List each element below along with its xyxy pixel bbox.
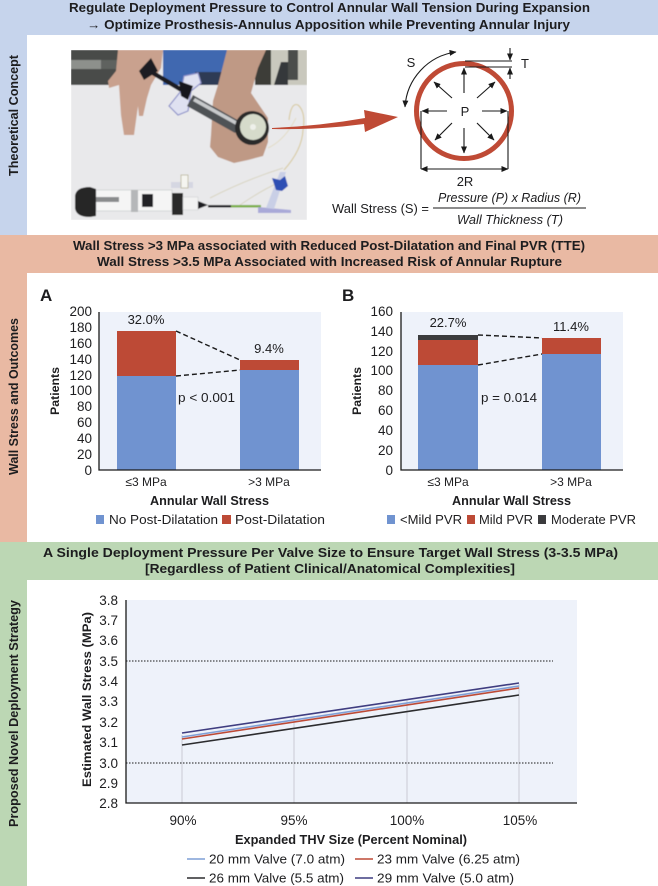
legend: chart A: Post-Dilatation xyxy=(235,513,325,527)
chart B: paravalvular regurgitation by annular wall stress: 20 xyxy=(378,443,393,458)
legend: chart B: <Mild PVR xyxy=(400,513,462,527)
line chart: estimated wall stress vs expanded THV size: 90% xyxy=(169,813,197,828)
chart B: paravalvular regurgitation by annular wall stress: 140 xyxy=(370,324,393,339)
formula: wall stress: Wall Stress (S) = xyxy=(332,202,429,216)
side label: proposed strategy: Proposed Novel Deployment Strategy xyxy=(7,600,21,827)
chart A: post-dilatation by annular wall stress: 140 xyxy=(69,352,92,367)
line chart: estimated wall stress vs expanded THV size: 100% xyxy=(390,813,424,828)
chart B: paravalvular regurgitation by annular wall stress: 80 xyxy=(378,383,393,398)
chart B: paravalvular regurgitation by annular wall stress: 40 xyxy=(378,423,393,438)
chart A: post-dilatation by annular wall stress: 120 xyxy=(69,368,92,383)
chart A: post-dilatation by annular wall stress: 100 xyxy=(69,383,92,398)
chart A: post-dilatation by annular wall stress: >3 MPa xyxy=(248,475,290,489)
chart B: paravalvular regurgitation by annular wall stress: 60 xyxy=(378,403,393,418)
chart B: paravalvular regurgitation by annular wall stress: p = 0.014 xyxy=(481,390,537,405)
line chart: estimated wall stress vs expanded THV size: 3.4 xyxy=(99,674,118,689)
chart A: post-dilatation by annular wall stress: p < 0.001 xyxy=(178,390,235,405)
chart A: post-dilatation by annular wall stress: 60 xyxy=(77,415,92,430)
diagram: annulus wall stress: T xyxy=(521,56,529,71)
photo: balloon inflation device in hands xyxy=(71,50,307,220)
chart B: paravalvular regurgitation by annular wall stress: 160 xyxy=(370,304,393,319)
chart B: paravalvular regurgitation by annular wall stress: 11.4% xyxy=(553,319,589,334)
heading: proposed strategy: [Regardless of Patient Clinical/Anatomical Complexities] xyxy=(145,562,515,576)
diagram: annulus wall stress xyxy=(405,48,529,189)
formula: wall stress: Wall Thickness (T) xyxy=(457,213,563,227)
chart B: paravalvular regurgitation by annular wall stress: ≤3 MPa xyxy=(427,475,469,489)
heading: wall stress and outcomes: Wall Stress >3.5 MPa Associated with Increased Risk of Annular Rupture xyxy=(97,255,562,269)
side label: wall stress and outcomes: Wall Stress and Outcomes xyxy=(7,318,21,475)
legend: chart A: No Post-Dilatation xyxy=(109,513,218,527)
chart B: paravalvular regurgitation by annular wall stress: 100 xyxy=(370,363,393,378)
chart A: post-dilatation by annular wall stress: ≤3 MPa xyxy=(125,475,167,489)
legend: valve sizes: 23 mm Valve (6.25 atm) xyxy=(377,852,520,866)
heading: wall stress and outcomes xyxy=(73,239,585,269)
line chart: estimated wall stress vs expanded THV size: 3.8 xyxy=(99,593,118,608)
legend: valve sizes xyxy=(187,852,520,886)
line chart: estimated wall stress vs expanded THV size: 3.5 xyxy=(99,654,118,669)
side label: theoretical concept: Theoretical Concept xyxy=(7,54,21,176)
line chart: estimated wall stress vs expanded THV size: 2.9 xyxy=(99,776,118,791)
heading: theoretical concept xyxy=(69,1,590,32)
formula: wall stress: Pressure (P) x Radius (R) xyxy=(438,191,581,205)
line chart: estimated wall stress vs expanded THV size: Expanded THV Size (Percent Nominal) xyxy=(235,833,467,847)
chart A: post-dilatation by annular wall stress: Patients xyxy=(48,367,62,415)
chart A: post-dilatation by annular wall stress: A xyxy=(40,286,52,305)
chart A: post-dilatation by annular wall stress: 80 xyxy=(77,399,92,414)
formula: wall stress xyxy=(332,191,586,227)
legend: chart B: Moderate PVR xyxy=(551,513,636,527)
chart B: paravalvular regurgitation by annular wall stress: Annular Wall Stress xyxy=(452,494,571,508)
chart A: post-dilatation by annular wall stress: 20 xyxy=(77,447,92,462)
line chart: estimated wall stress vs expanded THV size: 3.7 xyxy=(99,613,118,628)
legend: chart B xyxy=(387,513,636,527)
heading: proposed strategy: A Single Deployment Pressure Per Valve Size to Ensure Target Wall Stress (3-3.5 MPa) xyxy=(43,546,618,560)
chart A: post-dilatation by annular wall stress: 32.0% xyxy=(128,312,165,327)
line chart: estimated wall stress vs expanded THV size: 2.8 xyxy=(99,796,118,811)
line chart: estimated wall stress vs expanded THV size: Estimated Wall Stress (MPa) xyxy=(80,612,94,787)
diagram: annulus wall stress: 2R xyxy=(457,174,473,189)
line chart: estimated wall stress vs expanded THV size: 95% xyxy=(280,813,308,828)
line chart: estimated wall stress vs expanded THV size xyxy=(80,593,577,886)
heading: theoretical concept: → Optimize Prosthesis-Annulus Apposition while Preventing Annular Injury xyxy=(87,18,570,32)
panel: proposed novel deployment strategy xyxy=(0,542,658,886)
line chart: estimated wall stress vs expanded THV size: 3.6 xyxy=(99,633,118,648)
chart B: paravalvular regurgitation by annular wall stress: 22.7% xyxy=(430,315,467,330)
chart A: post-dilatation by annular wall stress: 9.4% xyxy=(254,341,284,356)
chart B: paravalvular regurgitation by annular wall stress xyxy=(342,286,636,527)
chart A: post-dilatation by annular wall stress: 180 xyxy=(69,320,92,335)
chart A: post-dilatation by annular wall stress: 40 xyxy=(77,431,92,446)
panel: wall stress and outcomes xyxy=(0,235,658,542)
legend: valve sizes: 20 mm Valve (7.0 atm) xyxy=(209,852,345,866)
heading: proposed strategy xyxy=(43,546,618,576)
legend: chart B: Mild PVR xyxy=(479,513,533,527)
chart B: paravalvular regurgitation by annular wall stress: B xyxy=(342,286,354,305)
line chart: estimated wall stress vs expanded THV size: 3.3 xyxy=(99,694,118,709)
line chart: estimated wall stress vs expanded THV size: 105% xyxy=(503,813,537,828)
chart B: paravalvular regurgitation by annular wall stress: >3 MPa xyxy=(550,475,592,489)
chart B: paravalvular regurgitation by annular wall stress: Patients xyxy=(350,367,364,415)
chart A: post-dilatation by annular wall stress xyxy=(40,286,325,527)
panel: theoretical concept xyxy=(0,0,658,235)
legend: valve sizes: 26 mm Valve (5.5 atm) xyxy=(209,872,344,886)
diagram: annulus wall stress: S xyxy=(407,55,416,70)
line chart: estimated wall stress vs expanded THV size: 3.2 xyxy=(99,715,118,730)
line chart: estimated wall stress vs expanded THV size: 3.0 xyxy=(99,756,118,771)
line chart: estimated wall stress vs expanded THV size: 3.1 xyxy=(99,735,118,750)
heading: wall stress and outcomes: Wall Stress >3 MPa associated with Reduced Post-Dilatation and Final PVR (TTE) xyxy=(73,239,585,253)
arrow: photo to diagram xyxy=(272,110,398,132)
chart A: post-dilatation by annular wall stress: 200 xyxy=(69,304,92,319)
chart A: post-dilatation by annular wall stress: Annular Wall Stress xyxy=(150,494,269,508)
heading: theoretical concept: Regulate Deployment Pressure to Control Annular Wall Tension During Expansion xyxy=(69,1,590,15)
chart A: post-dilatation by annular wall stress: 160 xyxy=(69,336,92,351)
chart B: paravalvular regurgitation by annular wall stress: 120 xyxy=(370,344,393,359)
chart A: post-dilatation by annular wall stress: 0 xyxy=(84,463,92,478)
legend: valve sizes: 29 mm Valve (5.0 atm) xyxy=(377,872,514,886)
chart B: paravalvular regurgitation by annular wall stress: 0 xyxy=(385,463,393,478)
legend: chart A xyxy=(96,513,325,527)
diagram: annulus wall stress: P xyxy=(461,104,469,119)
